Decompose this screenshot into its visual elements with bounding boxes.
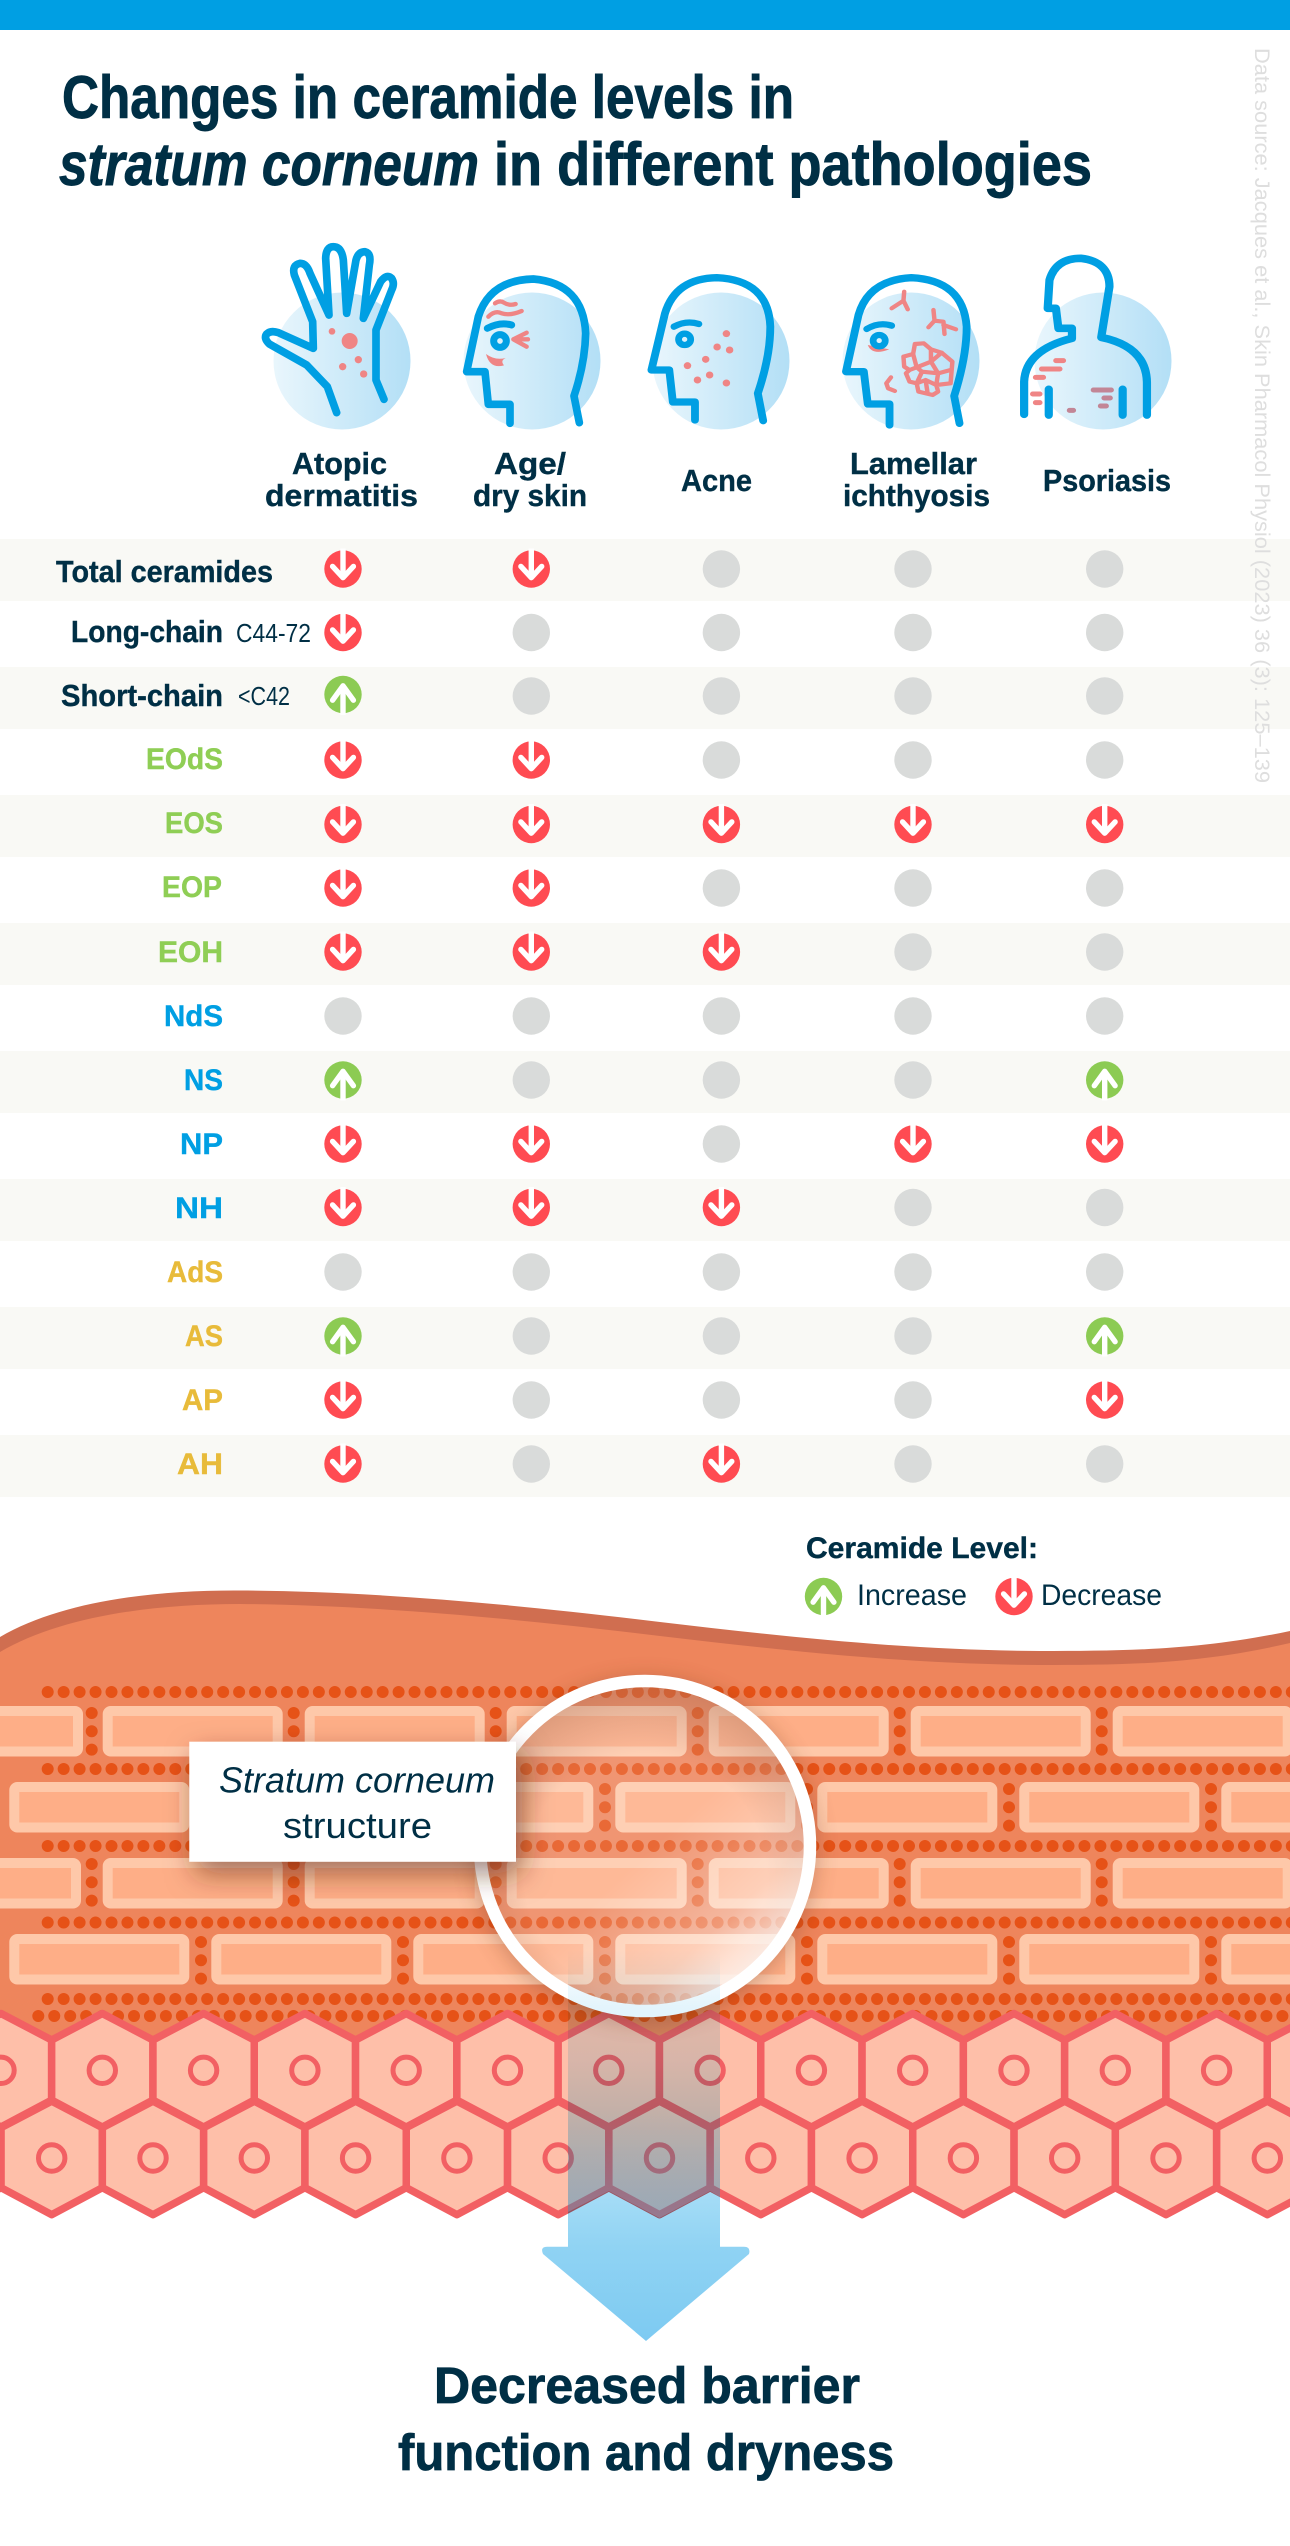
row: EOdS	[146, 740, 1123, 779]
row: EOS	[165, 804, 1123, 843]
skin cross-section	[0, 1590, 1290, 2215]
row: Total ceramides	[56, 548, 1123, 589]
column headings: Lamellar	[850, 446, 977, 481]
data source note: Data source: Jacques et al., Skin Pharmacol Physiol (2023) 36 (3): 125–139	[1250, 48, 1273, 783]
column headings: dermatitis	[265, 478, 418, 513]
row: Total ceramides: Total ceramides	[56, 554, 273, 589]
legend: ceramide level: Increase	[857, 1579, 967, 1612]
row: EOP	[162, 868, 1123, 907]
outcome text: function and dryness	[398, 2424, 894, 2481]
icon: torso, psoriasis	[1024, 258, 1172, 430]
corneocyte bricks	[0, 1711, 1290, 1980]
icon: head, acne	[651, 278, 790, 430]
label: stratum corneum structure	[189, 1742, 516, 1862]
column headings: ichthyosis	[843, 478, 990, 513]
title: in different pathologies	[494, 131, 1092, 198]
title: Changes in ceramide levels in	[62, 64, 794, 131]
icon: head, lamellar ichthyosis	[842, 278, 980, 430]
row: Long-chain	[71, 612, 1123, 651]
row: Long-chain: C44-72	[236, 618, 311, 648]
row: NS	[184, 1061, 1123, 1100]
row: AP: AP	[182, 1384, 223, 1417]
row: EOP: EOP	[162, 871, 222, 904]
column headings: Atopic	[292, 446, 387, 481]
row: Short-chain: Short-chain	[61, 678, 223, 713]
legend: ceramide level: Ceramide Level:	[806, 1532, 1038, 1565]
icon: hand, atopic dermatitis	[265, 247, 410, 430]
row: Short-chain	[61, 676, 1123, 715]
icon: head, age and dry skin	[464, 279, 600, 430]
lipid dot rows	[38, 1692, 1290, 2016]
row: AS: AS	[185, 1320, 223, 1353]
top bar	[0, 0, 1290, 30]
row: AH	[177, 1444, 1123, 1483]
column headings: Acne	[681, 463, 752, 498]
row: NdS	[164, 997, 1123, 1035]
column headings: Psoriasis	[1043, 463, 1171, 498]
row: NS: NS	[184, 1064, 223, 1097]
magnifying lens	[468, 1670, 826, 2032]
column headings: dry skin	[473, 478, 587, 513]
label: stratum corneum structure: structure	[283, 1805, 432, 1846]
outcome text: Decreased barrier	[434, 2357, 860, 2414]
title: stratum corneum	[59, 131, 479, 198]
table row bands	[0, 539, 1290, 1497]
keratinocyte hexagons	[0, 2014, 1290, 2215]
arrow: pointing to outcome	[542, 1950, 749, 2341]
row: NH: NH	[175, 1192, 223, 1225]
column headings	[265, 446, 1171, 513]
lipid dots between bricks	[92, 1713, 1211, 1979]
row: AdS: AdS	[167, 1256, 223, 1289]
row: Long-chain: Long-chain	[71, 614, 223, 649]
legend: ceramide level: Decrease	[1041, 1579, 1162, 1612]
column headings: Age/	[494, 446, 566, 481]
row: EOdS: EOdS	[146, 743, 223, 776]
row: NdS: NdS	[164, 1000, 223, 1033]
row: EOH: EOH	[158, 936, 223, 969]
row: AdS	[167, 1253, 1123, 1291]
label: stratum corneum structure: Stratum corneum	[219, 1760, 495, 1801]
row: NP: NP	[180, 1128, 223, 1161]
row: AS	[185, 1317, 1123, 1356]
row: Short-chain: <C42	[238, 681, 290, 711]
legend: ceramide level	[805, 1532, 1162, 1617]
row: EOS: EOS	[165, 807, 223, 840]
row: AP	[182, 1380, 1123, 1419]
title	[59, 64, 1092, 198]
row: NP	[180, 1124, 1123, 1163]
row: AH: AH	[177, 1448, 223, 1481]
outcome text	[398, 2357, 894, 2481]
row: NH	[175, 1187, 1123, 1226]
row: EOH	[158, 932, 1123, 971]
